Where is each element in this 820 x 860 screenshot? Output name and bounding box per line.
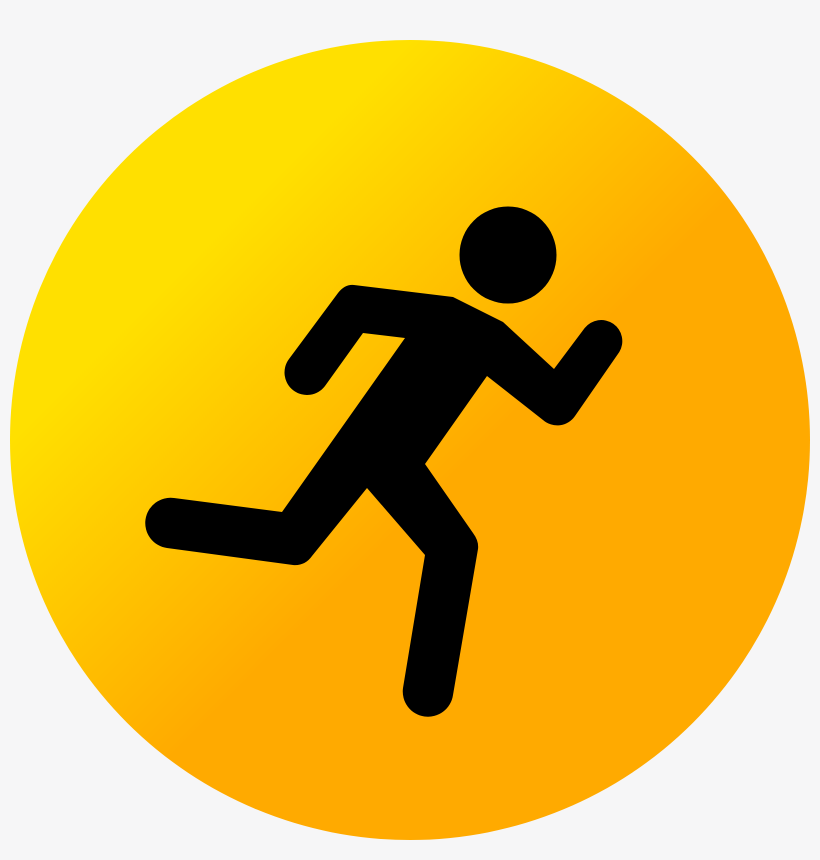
running figure xyxy=(145,206,622,717)
torso and limbs xyxy=(145,285,622,717)
head xyxy=(460,206,556,304)
